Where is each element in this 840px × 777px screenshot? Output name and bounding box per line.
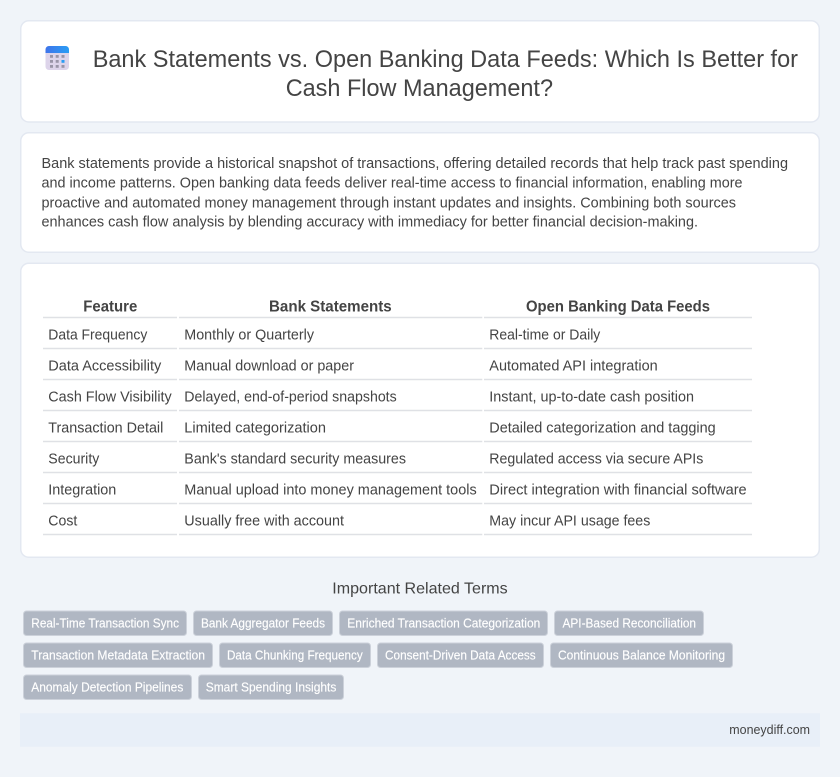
- row: transaction detail: Limited categorization: [184, 420, 326, 436]
- tag: transaction metadata extraction: Transaction Metadata Extraction: [31, 648, 205, 662]
- row: transaction detail: [48, 420, 716, 436]
- row: integration: Direct integration with financial software: [489, 482, 747, 498]
- row: security: Bank's standard security measures: [184, 451, 406, 467]
- summary paragraph: Bank statements provide a historical snapshot of transactions, offering detailed records that help track past spending: [42, 156, 788, 172]
- tag: bank aggregator feeds: Bank Aggregator Feeds: [201, 616, 325, 630]
- summary paragraph: and income patterns. Open banking data feeds deliver real-time access to financial information, enabling more: [42, 176, 742, 192]
- row: data frequency: Real-time or Daily: [489, 327, 601, 343]
- row: cost: May incur API usage fees: [489, 513, 650, 529]
- tag: continuous balance monitoring: Continuous Balance Monitoring: [558, 648, 725, 662]
- tag: api-based reconciliation: API-Based Reconciliation: [562, 616, 696, 630]
- summary paragraph: [42, 156, 788, 230]
- panel: comparison table: [21, 263, 819, 557]
- row: cost: [48, 513, 650, 529]
- tag: real-time transaction sync: Real-Time Transaction Sync: [31, 616, 179, 630]
- tag: anomaly detection pipelines: Anomaly Detection Pipelines: [31, 680, 183, 694]
- table header row: [83, 299, 710, 316]
- tag: api-based reconciliation: [554, 611, 704, 636]
- table header row: Open Banking Data Feeds: [526, 299, 710, 316]
- row: data accessibility: Manual download or paper: [184, 358, 354, 374]
- panel: header: [21, 21, 819, 122]
- panel: summary text: [21, 133, 819, 252]
- row: data accessibility: Automated API integration: [489, 358, 658, 374]
- row: integration: Integration: [48, 482, 116, 498]
- tag: data chunking frequency: [220, 643, 370, 668]
- tag: transaction metadata extraction: [24, 643, 212, 668]
- row: security: Security: [48, 451, 100, 467]
- title: [93, 46, 798, 102]
- row: data accessibility: [48, 358, 658, 374]
- row: security: Regulated access via secure APIs: [489, 451, 703, 467]
- row: cash flow visibility: Cash Flow Visibility: [48, 389, 172, 405]
- tag: enriched transaction categorization: [340, 611, 548, 636]
- tag: enriched transaction categorization: Enriched Transaction Categorization: [347, 616, 540, 630]
- footer source: moneydiff.com: [729, 722, 810, 737]
- related term tags: [24, 611, 732, 700]
- tag: bank aggregator feeds: [194, 611, 332, 636]
- tag: continuous balance monitoring: [550, 643, 732, 668]
- tag: consent-driven data access: [378, 643, 544, 668]
- row: integration: Manual upload into money management tools: [184, 482, 477, 498]
- row: cash flow visibility: [48, 389, 694, 405]
- footer bar: [20, 713, 820, 747]
- row: data frequency: [48, 327, 601, 343]
- row: transaction detail: Detailed categorization and tagging: [489, 420, 716, 436]
- summary paragraph: enhances cash flow analysis by blending accuracy with immediacy for better financial decision-making.: [42, 214, 698, 230]
- row: cost: Cost: [48, 513, 77, 529]
- table header row: Feature: [83, 299, 137, 316]
- tag: real-time transaction sync: [24, 611, 186, 636]
- summary paragraph: proactive and automated money management through instant updates and insights. Combining both sources: [42, 195, 736, 211]
- row: cost: Usually free with account: [184, 513, 344, 529]
- row: integration: [48, 482, 747, 498]
- tag: smart spending insights: [198, 675, 344, 700]
- table header row: Bank Statements: [269, 299, 392, 316]
- title: Bank Statements vs. Open Banking Data Feeds: Which Is Better for: [93, 46, 798, 73]
- row: cash flow visibility: Instant, up-to-date cash position: [489, 389, 694, 405]
- icon: calendar: [46, 46, 69, 70]
- title: Cash Flow Management?: [286, 75, 553, 102]
- tag: consent-driven data access: Consent-Driven Data Access: [385, 648, 536, 662]
- row: data accessibility: Data Accessibility: [48, 358, 162, 374]
- row: transaction detail: Transaction Detail: [48, 420, 163, 436]
- row: security: [48, 451, 703, 467]
- heading: important related terms: Important Related Terms: [332, 580, 508, 597]
- row: data frequency: Monthly or Quarterly: [184, 327, 315, 343]
- tag: data chunking frequency: Data Chunking Frequency: [227, 648, 363, 662]
- tag: smart spending insights: Smart Spending Insights: [206, 680, 336, 694]
- row: cash flow visibility: Delayed, end-of-period snapshots: [184, 389, 397, 405]
- tag: anomaly detection pipelines: [24, 675, 192, 700]
- row: data frequency: Data Frequency: [48, 327, 148, 343]
